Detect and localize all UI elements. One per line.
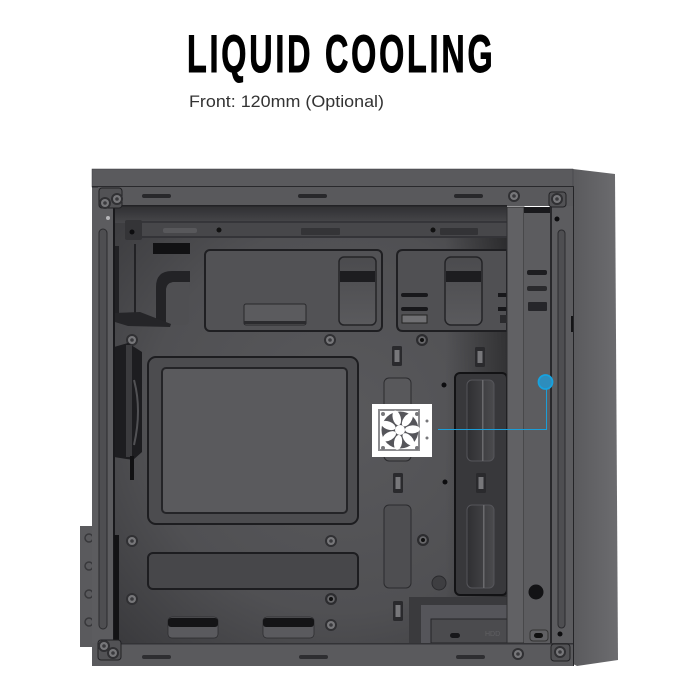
upper PSU cutout panel: [205, 250, 382, 331]
bottom rail: [92, 640, 573, 666]
HDD cage: [409, 597, 507, 643]
cable tie clips: [392, 346, 486, 621]
motherboard tray back panel: [113, 205, 507, 645]
rear case fan: [114, 312, 171, 480]
top recess: [115, 205, 507, 240]
right pillar and inner panel: [507, 205, 552, 643]
PC case interior illustration: [80, 169, 618, 666]
left rail: [92, 186, 119, 666]
lower recess: [148, 553, 358, 589]
callout leader line: [438, 386, 546, 430]
title: LIQUID COOLING: [187, 25, 493, 84]
right dark frame with windows: [455, 373, 507, 595]
top rail: [92, 169, 573, 220]
HDD cage: HDD: [485, 631, 500, 638]
case side panel: [573, 169, 618, 666]
central vertical slots: [384, 378, 411, 588]
callout marker dot: [538, 375, 552, 389]
upper-left cable cutout: [115, 243, 190, 325]
rear expansion bracket: [80, 526, 93, 647]
subtitle: radiator support: Front: 120mm (Optional): [189, 93, 384, 111]
upper-right cutout panel: [397, 250, 507, 331]
bottom slots: [168, 617, 314, 638]
right rail: [552, 186, 574, 666]
large motherboard recess: [148, 357, 358, 524]
standoffs and holes: [126, 334, 448, 631]
icon: radiator with fan: [372, 404, 432, 457]
